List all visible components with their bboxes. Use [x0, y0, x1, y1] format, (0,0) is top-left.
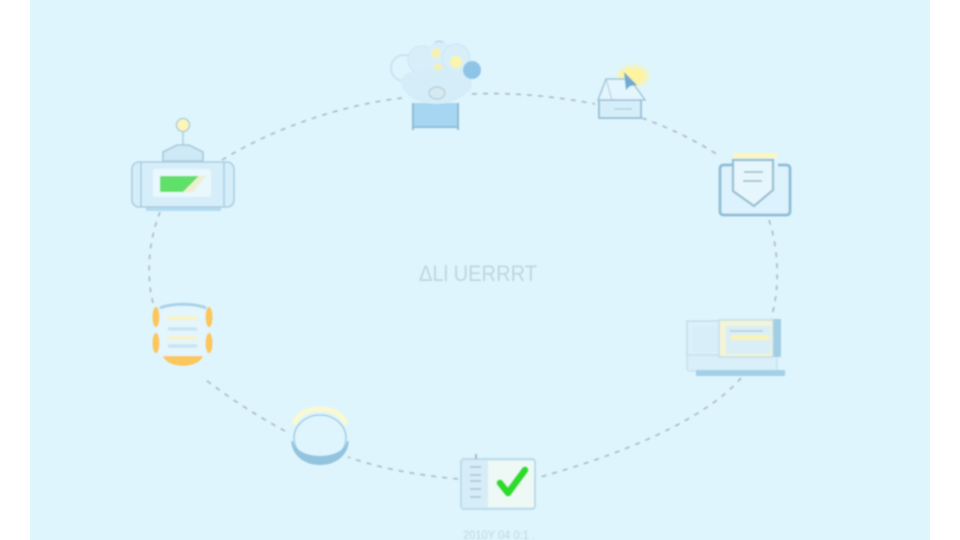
icon: ring	[292, 409, 348, 464]
icon: envelope with note	[720, 153, 790, 215]
icon: laptop with chat card	[687, 319, 785, 376]
icon: checklist with green check	[461, 454, 535, 509]
icon: battery robot	[132, 118, 234, 211]
icon: cloud on box	[391, 41, 481, 130]
center title: ΔLl UERRRT	[419, 261, 537, 286]
icon: open box with cursor	[598, 66, 648, 118]
icon: list card with orange tabs	[152, 304, 212, 366]
dashed cycle ring	[149, 94, 777, 479]
